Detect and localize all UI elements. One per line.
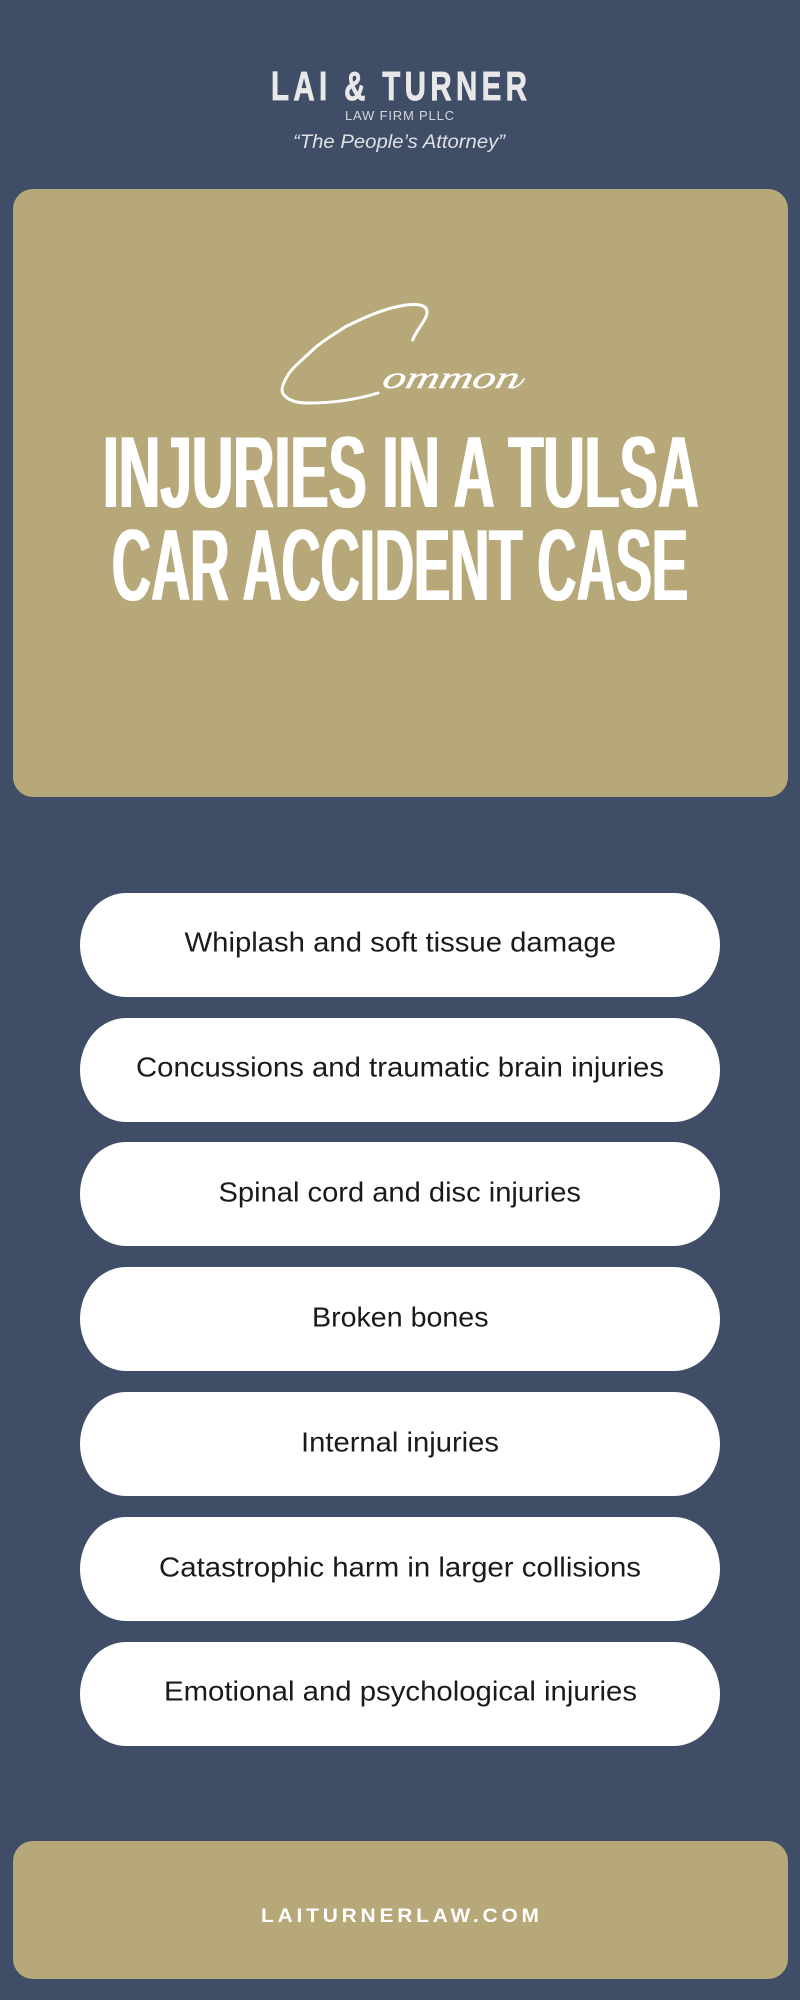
pill: concussions: Concussions and traumatic brain injuries — [136, 1052, 664, 1082]
script tail — [512, 379, 524, 388]
logo name: LAI & TURNER — [271, 63, 527, 109]
footer website: LAITURNERLAW.COM — [261, 1906, 539, 1927]
pill: broken bones — [80, 1267, 720, 1371]
script word: Common — [282, 305, 524, 403]
pill: spinal cord: Spinal cord and disc injuries — [218, 1176, 581, 1208]
pill: catastrophic harm — [80, 1517, 720, 1621]
logo subtitle: LAW FIRM PLLC — [345, 108, 454, 123]
list of injuries — [80, 893, 720, 1746]
pill: whiplash — [80, 893, 720, 997]
panel: hero title — [13, 189, 788, 797]
pill: concussions — [80, 1018, 720, 1122]
pill: catastrophic harm: Catastrophic harm in larger collisions — [159, 1552, 641, 1582]
pill: spinal cord — [80, 1142, 720, 1246]
pill: internal injuries — [80, 1392, 720, 1496]
slogan: “The People’s Attorney” — [293, 132, 507, 153]
script capital C — [282, 305, 427, 403]
pill: emotional injuries: Emotional and psychological injuries — [164, 1676, 637, 1706]
pill: emotional injuries — [80, 1642, 720, 1746]
pill: broken bones: Broken bones — [312, 1302, 488, 1332]
pill: whiplash: Whiplash and soft tissue damage — [184, 926, 616, 958]
panel: footer — [13, 1841, 788, 1979]
header: law firm logo — [271, 63, 527, 153]
pill: internal injuries: Internal injuries — [301, 1426, 499, 1458]
script letters: ommon — [379, 360, 524, 395]
